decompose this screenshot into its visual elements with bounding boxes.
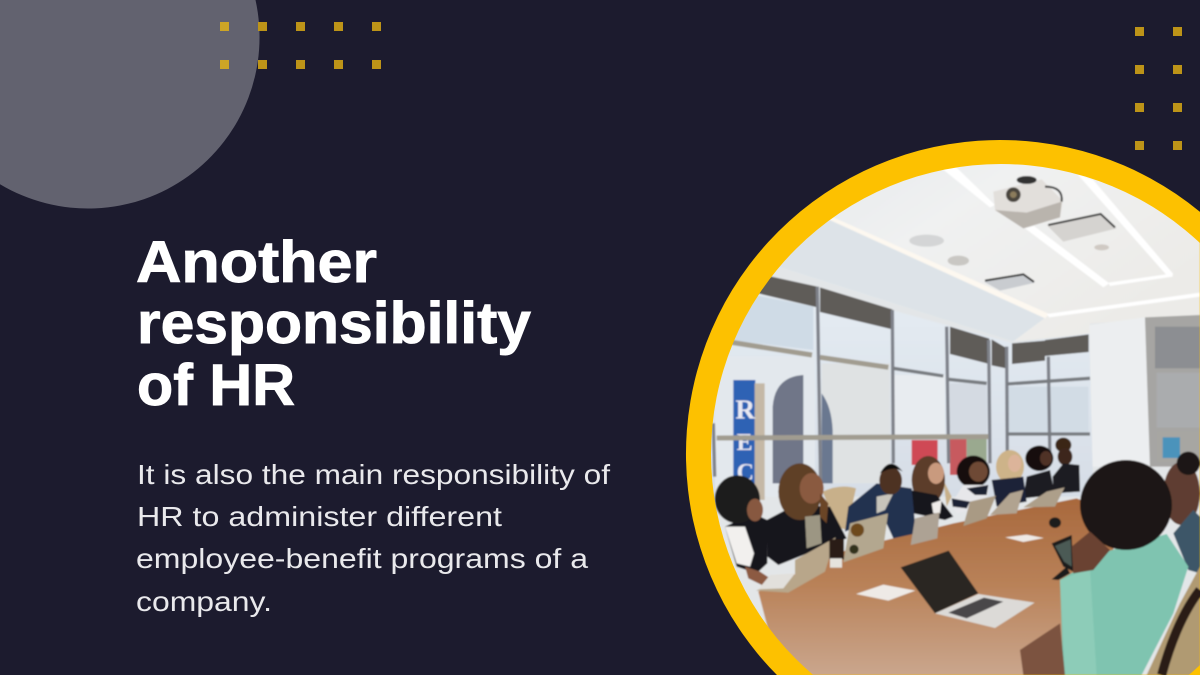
body text: HR to administer different (137, 501, 502, 532)
column and right wall (1089, 315, 1200, 467)
street building: E (737, 430, 753, 456)
street building (715, 293, 1088, 500)
decorative grey circle (0, 0, 260, 209)
body text (136, 459, 610, 617)
dot grid: right (1135, 27, 1182, 150)
title: of HR (137, 353, 295, 418)
street building: R (735, 395, 755, 425)
yellow ring (686, 140, 1200, 675)
foreground chair (1147, 567, 1200, 675)
body text: employee-benefit programs of a (136, 543, 588, 574)
tablet (1052, 535, 1073, 580)
person: woman 6 (992, 450, 1027, 507)
title: Another (136, 230, 377, 295)
person: woman 4 (910, 456, 953, 520)
chairs (823, 480, 952, 530)
seated women at right (1163, 452, 1200, 573)
person: woman 2 (767, 463, 847, 565)
title (136, 230, 531, 418)
projector (993, 176, 1063, 228)
person: woman 1 (715, 475, 775, 587)
window frames (713, 287, 1090, 487)
foreground woman in teal jacket (1020, 460, 1188, 675)
photo: meeting room (711, 164, 1200, 675)
ceiling (839, 164, 1199, 340)
dot grid: top (220, 22, 381, 69)
body text: company. (136, 586, 272, 617)
ceiling vents and fixtures (909, 213, 1117, 291)
conference table (758, 498, 1113, 675)
person: woman 5 (952, 456, 990, 513)
ceiling lights (824, 166, 1200, 318)
person: woman 7 (1023, 446, 1055, 498)
body text: It is also the main responsibility of (137, 459, 610, 490)
papers on table (856, 535, 1044, 601)
person: woman 8 (1053, 438, 1080, 493)
street building: C (737, 460, 754, 486)
window blinds (755, 273, 1089, 369)
laptops along table (756, 487, 1065, 593)
front laptop (901, 551, 1035, 628)
person: man (845, 464, 916, 538)
window wall (710, 273, 1093, 497)
title: responsibility (137, 291, 531, 356)
